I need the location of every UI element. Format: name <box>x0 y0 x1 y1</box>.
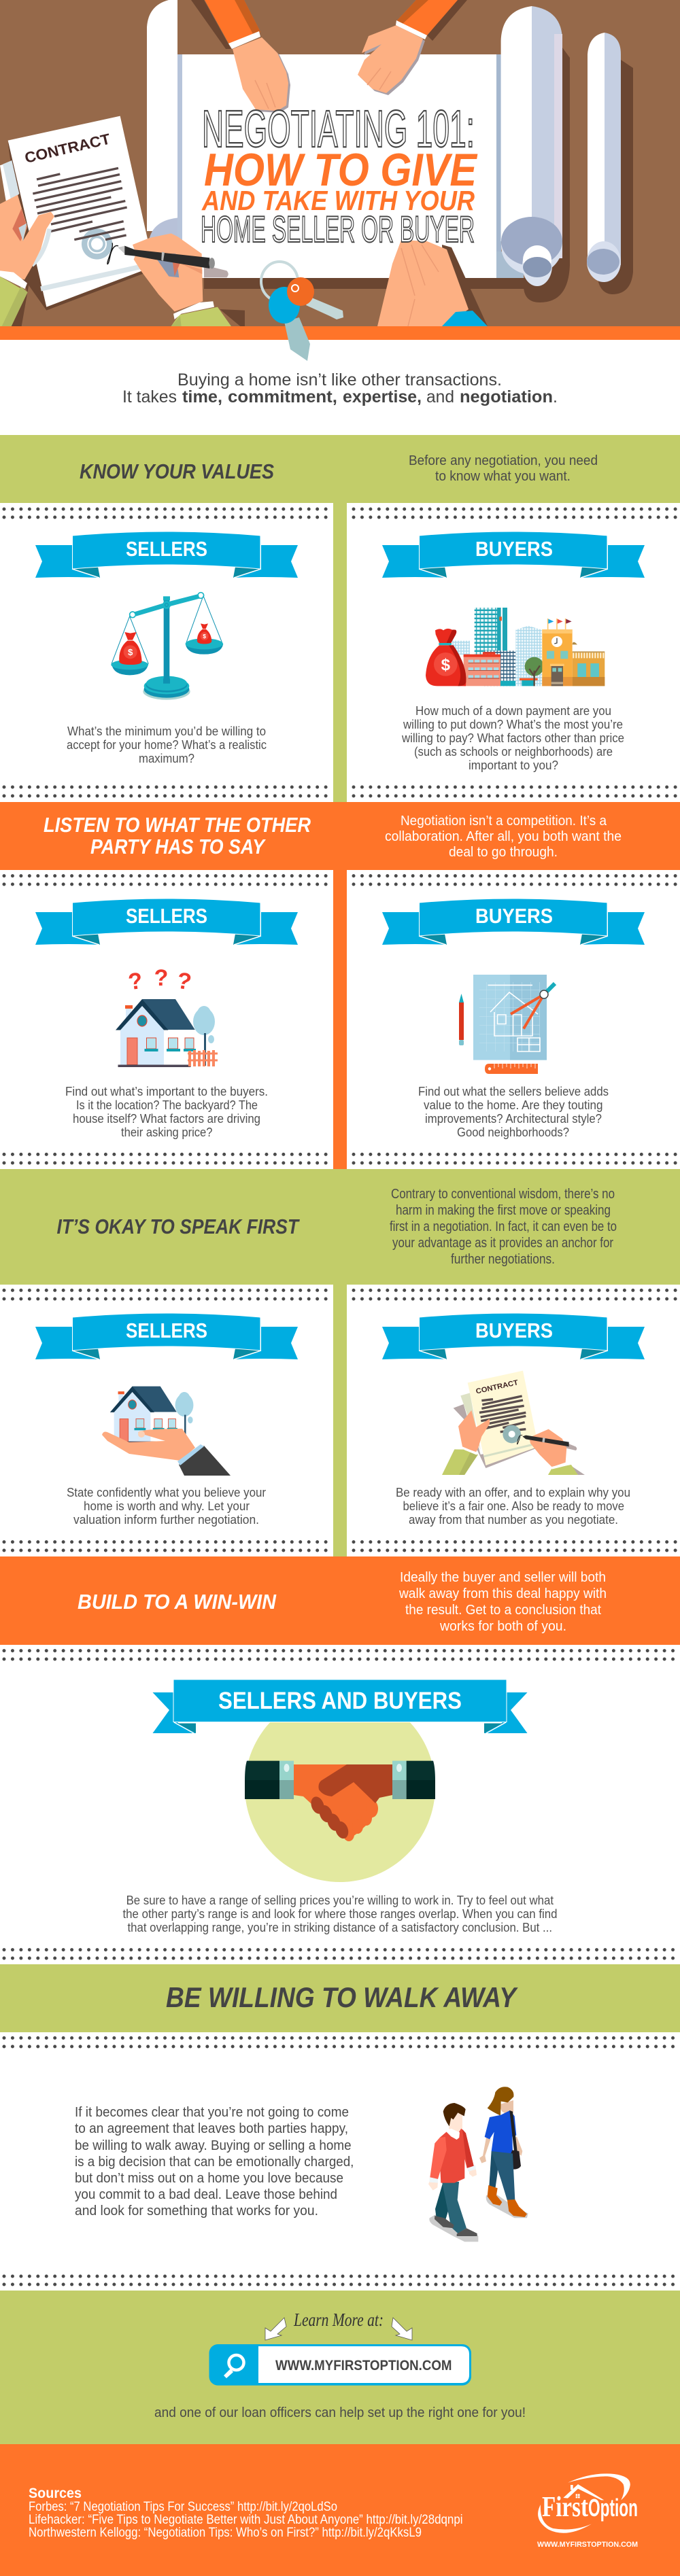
keys illustration <box>261 262 343 361</box>
band: speak first <box>0 1169 680 1285</box>
band: listen: PARTY HAS TO SAY <box>90 835 267 858</box>
sellers text <box>65 1085 268 1139</box>
sellers text: home is worth and why. Let your <box>84 1499 250 1513</box>
clasped hands and blue sleeve <box>377 240 488 326</box>
buyers text: away from that number as you negotiate. <box>409 1513 618 1527</box>
sellers banner: SELLERS <box>126 904 207 928</box>
buyers text: willing to pay? What factors other than price <box>401 731 624 745</box>
buyers banner <box>382 532 645 578</box>
panel: listen <box>4 870 680 1169</box>
buyers banner: BUYERS <box>475 537 553 561</box>
buyers text: Good neighborhoods? <box>457 1126 569 1139</box>
band: speak first: Contrary to conventional wisdom, there’s no <box>391 1186 615 1202</box>
icon: money bag and city buildings <box>426 608 605 686</box>
band: win-win: BUILD TO A WIN-WIN <box>78 1590 277 1614</box>
band: speak first: your advantage as it provides an anchor for <box>392 1235 613 1251</box>
icon: balance scale with money bags: $ <box>128 647 133 657</box>
paragraph: and look for something that works for you. <box>75 2203 318 2218</box>
sellers text <box>67 1486 266 1527</box>
intro text: negotiation <box>460 387 553 406</box>
search box <box>209 2344 471 2386</box>
sellers banner <box>35 1313 298 1359</box>
icon: house held in hand <box>102 1387 231 1476</box>
sellers text: valuation inform further negotiation. <box>73 1513 259 1527</box>
title line 4: HOME SELLER OR BUYER <box>201 208 475 250</box>
woman <box>479 2087 527 2217</box>
intro text: time, <box>182 387 222 406</box>
icon: house with question marks: ? <box>126 968 144 995</box>
sellers banner <box>35 899 298 945</box>
arrow: right <box>392 2318 412 2340</box>
paragraph: but don’t miss out on a home you love because <box>75 2170 343 2186</box>
band: speak first: harm in making the first move or speaking <box>396 1202 611 1218</box>
sources: Lifehacker: “Five Tips to Negotiate Better with Just About Anyone” http://bit.ly/28dqnpi <box>29 2513 462 2527</box>
buyers text: How much of a down payment are you <box>415 704 611 718</box>
sellers text: their asking price? <box>121 1126 212 1139</box>
sellers text: maximum? <box>139 752 194 765</box>
search box: WWW.MYFIRSTOPTION.COM <box>275 2358 452 2373</box>
icon: blueprint with tools <box>459 975 555 1074</box>
footer <box>0 2444 680 2576</box>
title line 3: AND TAKE WITH YOUR <box>201 185 475 216</box>
intro text: . <box>553 387 558 406</box>
far right paper roll <box>587 33 621 282</box>
sellers text: What’s the minimum you’d be willing to <box>67 725 266 738</box>
buyers text <box>396 1486 630 1527</box>
buyers text: Find out what the sellers believe adds <box>418 1085 609 1098</box>
buyers text: important to you? <box>469 759 558 772</box>
paragraph: Be sure to have a range of selling prices you’re willing to work in. Try to feel out what <box>126 1894 554 1907</box>
band: walk away: BE WILLING TO WALK AWAY <box>166 1981 519 2013</box>
panel: sellers and buyers <box>4 1651 680 1958</box>
sources <box>29 2486 462 2540</box>
band: know your values: KNOW YOUR VALUES <box>80 459 274 483</box>
hands reaching from top <box>191 0 467 113</box>
band: listen <box>0 802 680 870</box>
buyers text: Be ready with an offer, and to explain why you <box>396 1486 630 1499</box>
paragraph: the other party’s range is and look for where those ranges overlap. When you can find <box>122 1907 558 1921</box>
buyers text <box>401 704 624 772</box>
intro text: Buying a home isn’t like other transactions. <box>177 370 502 389</box>
sources: Forbes: “7 Negotiation Tips For Success” http://bit.ly/2qoLdSo <box>29 2500 337 2514</box>
band: listen: LISTEN TO WHAT THE OTHER <box>44 813 311 837</box>
sellers text: house itself? What factors are driving <box>73 1112 260 1126</box>
intro text: expertise, <box>343 387 422 406</box>
logo: First <box>542 2492 588 2523</box>
icon: signing contract: CONTRACT <box>475 1378 520 1396</box>
intro text: and <box>426 387 454 406</box>
band: win-win: works for both of you. <box>439 1618 566 1634</box>
band: speak first: IT’S OKAY TO SPEAK FIRST <box>57 1215 301 1238</box>
intro text: commitment, <box>228 387 337 406</box>
icon: house with question marks: ? <box>154 965 168 991</box>
panel: values <box>4 503 680 802</box>
band: speak first: first in a negotiation. In fact, it can even be to <box>390 1219 617 1234</box>
paragraph: that overlapping range, you’re in striking distance of a satisfactory conclusion. But ... <box>128 1921 552 1934</box>
sellers text: accept for your home? What’s a realistic <box>67 738 267 752</box>
contract lines <box>33 168 127 240</box>
panel: speak first <box>4 1285 680 1556</box>
icon: handshake on circle <box>245 1692 435 1882</box>
buyers text: willing to put down? What’s the most you’re <box>403 718 623 731</box>
buyers banner <box>382 899 645 945</box>
contract heading: CONTRACT <box>23 130 112 167</box>
band: win-win: the result. Get to a conclusion that <box>405 1602 601 1618</box>
band: speak first: further negotiations. <box>451 1251 555 1267</box>
icon: house with question marks <box>116 965 218 1067</box>
sellers text <box>67 725 267 765</box>
icon: house with question marks: ? <box>175 967 193 996</box>
title <box>201 100 478 250</box>
sellers text: State confidently what you believe your <box>67 1486 266 1499</box>
icon: signing contract <box>442 1371 585 1475</box>
buyers text: value to the home. Are they touting <box>424 1098 602 1112</box>
call to action text: and one of our loan officers can help set up the right one for you! <box>154 2405 526 2420</box>
buyers banner <box>382 1313 645 1359</box>
band: win-win: Ideally the buyer and seller will both <box>400 1569 606 1585</box>
arrow: left <box>265 2318 286 2340</box>
contract illustration <box>0 116 245 326</box>
title line 2: HOW TO GIVE <box>204 144 478 196</box>
panel: walk away <box>4 2038 680 2284</box>
buyers text: (such as schools or neighborhoods) are <box>414 745 613 759</box>
icon: balance scale with money bags: $ <box>203 633 206 640</box>
band: listen: deal to go through. <box>449 844 558 860</box>
logo: WWW.MYFIRSTOPTION.COM <box>537 2541 638 2549</box>
logo: Option <box>588 2494 638 2522</box>
learn more heading: Learn More at: <box>293 2310 384 2330</box>
paragraph <box>75 2104 354 2218</box>
buyers text <box>418 1085 609 1139</box>
buyers banner: BUYERS <box>475 904 553 928</box>
sources: Northwestern Kellogg: “Negotiation Tips: Who’s on First?” http://bit.ly/2qKksL9 <box>29 2526 422 2540</box>
band: walk away <box>0 1964 680 2032</box>
sellers text: Find out what’s important to the buyers. <box>65 1085 268 1098</box>
sellers and buyers banner: SELLERS AND BUYERS <box>218 1688 462 1714</box>
sellers banner: SELLERS <box>126 537 207 561</box>
paragraph: you commit to a bad deal. Leave those behind <box>75 2187 337 2202</box>
paragraph: be willing to walk away. Buying or selling a home <box>75 2138 352 2153</box>
sellers and buyers banner <box>152 1679 528 1733</box>
band: listen: collaboration. After all, you both want the <box>385 829 622 844</box>
paragraph: is a big decision that can be emotionally charged, <box>75 2154 354 2170</box>
paragraph: to an agreement that leaves both parties happy, <box>75 2121 348 2136</box>
band: know your values <box>0 435 680 503</box>
icon: money bag and city buildings: $ <box>441 656 450 674</box>
paragraph <box>122 1894 558 1934</box>
buyers text: improvements? Architectural style? <box>425 1112 602 1126</box>
icon: couple walking <box>428 2087 528 2242</box>
left paper roll <box>147 0 182 279</box>
paragraph: If it becomes clear that you’re not going to come <box>75 2104 349 2120</box>
sellers banner <box>35 532 298 578</box>
logo <box>537 2473 638 2549</box>
sellers text: Is it the location? The backyard? The <box>76 1098 258 1112</box>
intro text <box>122 370 558 406</box>
band: know your values: Before any negotiation, you need <box>409 453 598 468</box>
band: win-win <box>0 1556 680 1645</box>
right paper roll <box>496 6 562 286</box>
sources: Sources <box>29 2486 82 2501</box>
band: win-win: walk away from this deal happy with <box>398 1586 607 1601</box>
buyers text: believe it’s a fair one. Also be ready to move <box>403 1499 624 1513</box>
man <box>428 2103 477 2236</box>
unrolled paper <box>177 54 501 278</box>
title line 1: NEGOTIATING 101: <box>202 100 475 158</box>
sellers banner: SELLERS <box>126 1319 207 1342</box>
buyers banner: BUYERS <box>475 1319 553 1342</box>
call to action panel <box>0 2291 680 2444</box>
band: listen: Negotiation isn’t a competition. It’s a <box>401 813 607 829</box>
hero illustration <box>0 0 680 361</box>
icon: balance scale with money bags <box>111 593 223 700</box>
band: know your values: to know what you want. <box>435 468 571 484</box>
intro text: It takes <box>122 387 177 406</box>
